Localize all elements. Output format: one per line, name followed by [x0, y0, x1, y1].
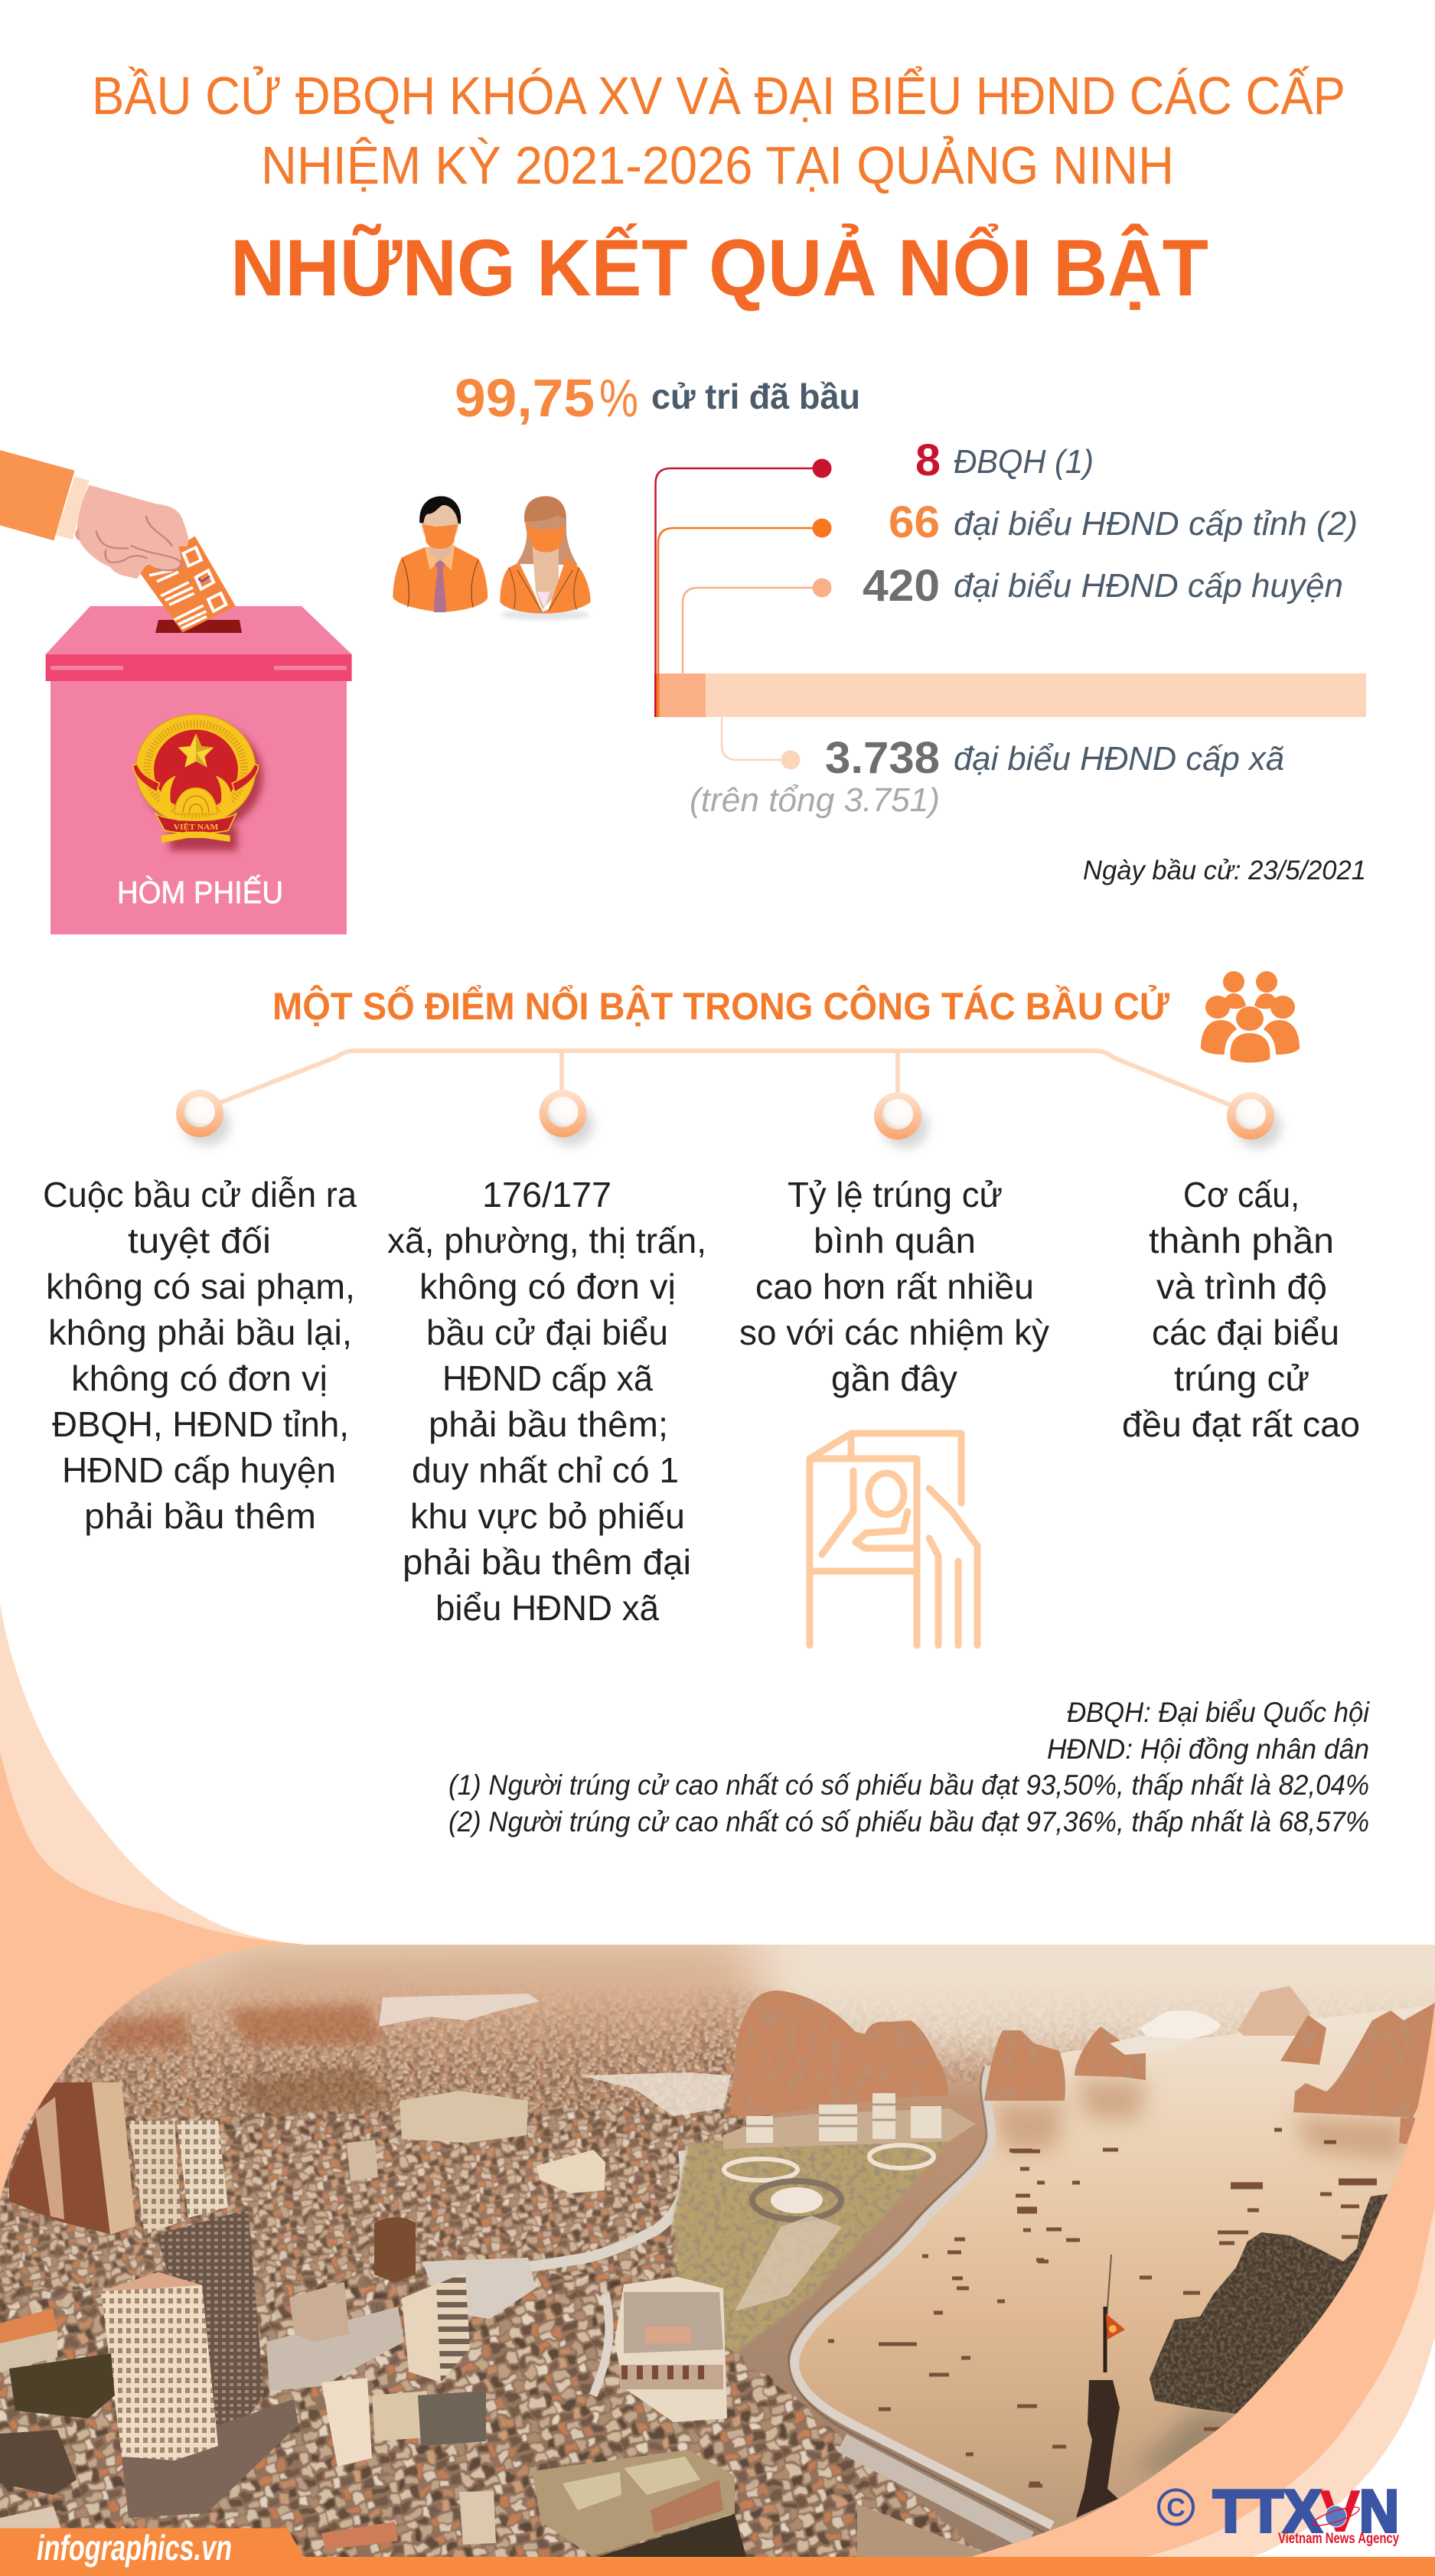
ballot box [46, 606, 352, 934]
market hall [532, 2450, 746, 2557]
text block: point 2: phải bầu thêm; [429, 1404, 668, 1444]
text block: point 2 [387, 1175, 706, 1628]
callout: 3.738 xã: (trên tổng 3.751) [690, 781, 940, 819]
callout: 3.738 xã: 3.738 [825, 733, 940, 783]
text block: point 2: xã, phường, thị trấn, [387, 1221, 706, 1260]
dark island [1148, 2189, 1401, 2418]
marker 1 [176, 1090, 230, 1146]
text block: point 2: 176/177 [482, 1175, 612, 1215]
text block: point 2: khu vực bỏ phiếu [410, 1496, 685, 1536]
text block: point 2: duy nhất chỉ có 1 [412, 1450, 679, 1490]
title: BẦU CỬ ĐBQH KHÓA XV VÀ ĐẠI BIỂU HĐND CÁC CẤP [92, 65, 1345, 126]
boats [828, 2130, 1359, 2486]
icon: national emblem [133, 714, 263, 851]
title: NHIỆM KỲ 2021-2026 TẠI QUẢNG NINH [261, 135, 1174, 195]
limestone karsts [719, 1982, 1435, 2150]
marker 4 [1227, 1092, 1281, 1148]
callout: 3.738 xã: đại biểu HĐND cấp xã [954, 740, 1284, 778]
turnout figure: % [599, 368, 638, 428]
footnotes: ĐBQH: Đại biểu Quốc hội [1067, 1697, 1371, 1728]
text block: point 2: bầu cử đại biểu [426, 1312, 668, 1352]
text block: point 3: Tỷ lệ trúng cử [788, 1175, 1003, 1215]
distant skyline haze [690, 2001, 1416, 2084]
white complex and lake [379, 1994, 540, 2027]
text block: point 1: không phải bầu lại, [48, 1312, 352, 1352]
park [672, 2140, 949, 2354]
callout: 66 tỉnh [658, 497, 1358, 673]
icon: masked female delegate [500, 496, 591, 621]
callout: 420 huyện: đại biểu HĐND cấp huyện [954, 567, 1343, 605]
dense city blocks: far [20, 1991, 770, 2146]
text block: point 4: và trình độ [1156, 1267, 1327, 1306]
waterfront buildings [723, 2093, 976, 2149]
footnotes: (1) Người trúng cử cao nhất có số phiếu bầu đạt 93,50%, thấp nhất là 82,04% [448, 1769, 1369, 1801]
stacked bar [654, 673, 1366, 717]
callout: 420 huyện [683, 561, 1343, 673]
timeline connector with four markers [176, 1051, 1281, 1148]
copyright mark: C [1166, 2493, 1186, 2522]
agency wordmark: Vietnam News Agency [1278, 2531, 1399, 2547]
turnout figure: 99,75 [455, 368, 595, 428]
text block: point 4: đều đạt rất cao [1122, 1404, 1360, 1444]
icon: national emblem: VIỆT NAM [174, 822, 218, 832]
ballot box: HÒM PHIẾU [117, 875, 283, 910]
text block: point 3 [739, 1175, 1049, 1398]
text block: point 4: các đại biểu [1152, 1312, 1339, 1352]
icon: voting booth [810, 1433, 977, 1645]
decorative swoosh: right [918, 1990, 1435, 2557]
footnotes: HĐND: Hội đồng nhân dân [1047, 1733, 1369, 1765]
photo: Ha Long bay and city [0, 1913, 1435, 2576]
section heading: MỘT SỐ ĐIỂM NỔI BẬT TRONG CÔNG TÁC BẦU CỬ [272, 984, 1169, 1028]
callout: 3.738 xã [690, 717, 1284, 819]
text block: point 2: HĐND cấp xã [442, 1358, 653, 1398]
icon: masked male delegate [393, 496, 488, 612]
footnotes [448, 1697, 1371, 1837]
bottom band [0, 2557, 1435, 2576]
text block: point 4: Cơ cấu, [1183, 1175, 1300, 1215]
text block: point 4: thành phần [1149, 1221, 1334, 1260]
text block: point 2: biểu HĐND xã [435, 1588, 659, 1628]
website tab: infographics.vn [37, 2528, 232, 2568]
text block: point 1: tuyệt đối [128, 1221, 271, 1260]
text block: point 1: phải bầu thêm [84, 1496, 316, 1536]
text block: point 3: bình quân [814, 1221, 976, 1260]
text block: point 1: không có đơn vị [71, 1358, 328, 1398]
sea [794, 2005, 1435, 2576]
text block: point 4 [1122, 1175, 1360, 1444]
text block: point 4: trúng cử [1174, 1358, 1309, 1398]
agency wordmark [1213, 2477, 1399, 2547]
text block: point 1: không có sai phạm, [46, 1267, 355, 1306]
decorative swoosh: left [0, 1603, 306, 2219]
callout: 8 ĐBQH: 8 [915, 435, 941, 485]
title [92, 65, 1345, 313]
footnotes: (2) Người trúng cử cao nhất có số phiếu bầu đạt 97,36%, thấp nhất là 68,57% [448, 1806, 1369, 1837]
theatre [615, 2277, 727, 2422]
coastal road [794, 2066, 1052, 2525]
marker 3 [874, 1092, 928, 1148]
icon: national emblem: CỘNG HÒA XÃ HỘI CHỦ NGHĨA [177, 817, 215, 822]
turnout figure [455, 368, 860, 428]
title: NHỮNG KẾT QUẢ NỔI BẬT [230, 222, 1208, 313]
logo: TTXVN [1159, 2477, 1399, 2547]
rock reflections [991, 2078, 1408, 2472]
agency wordmark: TTX [1213, 2477, 1322, 2545]
icon: hand and ballot [0, 450, 236, 633]
text block: point 3: cao hơn rất nhiều [755, 1267, 1034, 1306]
text block: point 3: gần đây [831, 1358, 957, 1398]
marker 2 [539, 1090, 593, 1146]
agency wordmark: V [1319, 2477, 1361, 2545]
text block: point 1 [43, 1175, 357, 1536]
orange tree canopy [99, 2004, 398, 2120]
callout: 8 ĐBQH: ĐBQH (1) [954, 443, 1094, 481]
text block: point 3: so với các nhiệm kỳ [739, 1312, 1049, 1352]
text block: point 2: phải bầu thêm đại [403, 1542, 691, 1582]
text block: point 2: không có đơn vị [419, 1267, 676, 1306]
agency wordmark: N [1359, 2477, 1399, 2545]
callout: 66 tỉnh: 66 [889, 497, 940, 547]
tower blocks [0, 2082, 605, 2557]
flagged mast [1076, 2255, 1125, 2518]
callout: 8 ĐBQH [655, 435, 1094, 673]
election date: Ngày bầu cử: 23/5/2021 [1083, 856, 1366, 885]
dense city blocks: middle [0, 2105, 773, 2319]
copyright mark [1159, 2490, 1193, 2524]
icon: hand casting ballot into box [0, 450, 352, 934]
turnout figure: cử tri đã bầu [651, 377, 860, 416]
dense city blocks: near [0, 2273, 995, 2564]
text block: point 1: ĐBQH, HĐND tỉnh, [52, 1404, 349, 1444]
white shell building [1140, 2010, 1221, 2043]
text block: point 1: Cuộc bầu cử diễn ra [43, 1175, 357, 1215]
icon: group of people [1201, 971, 1300, 1062]
callout: 66 tỉnh: đại biểu HĐND cấp tỉnh (2) [954, 505, 1358, 543]
hazy distant hills [230, 1913, 1435, 2059]
chart: delegate share bar with callouts [654, 435, 1366, 819]
text block: point 1: HĐND cấp huyện [62, 1450, 336, 1490]
roads [529, 2150, 689, 2397]
callout: 420 huyện: 420 [863, 561, 940, 611]
